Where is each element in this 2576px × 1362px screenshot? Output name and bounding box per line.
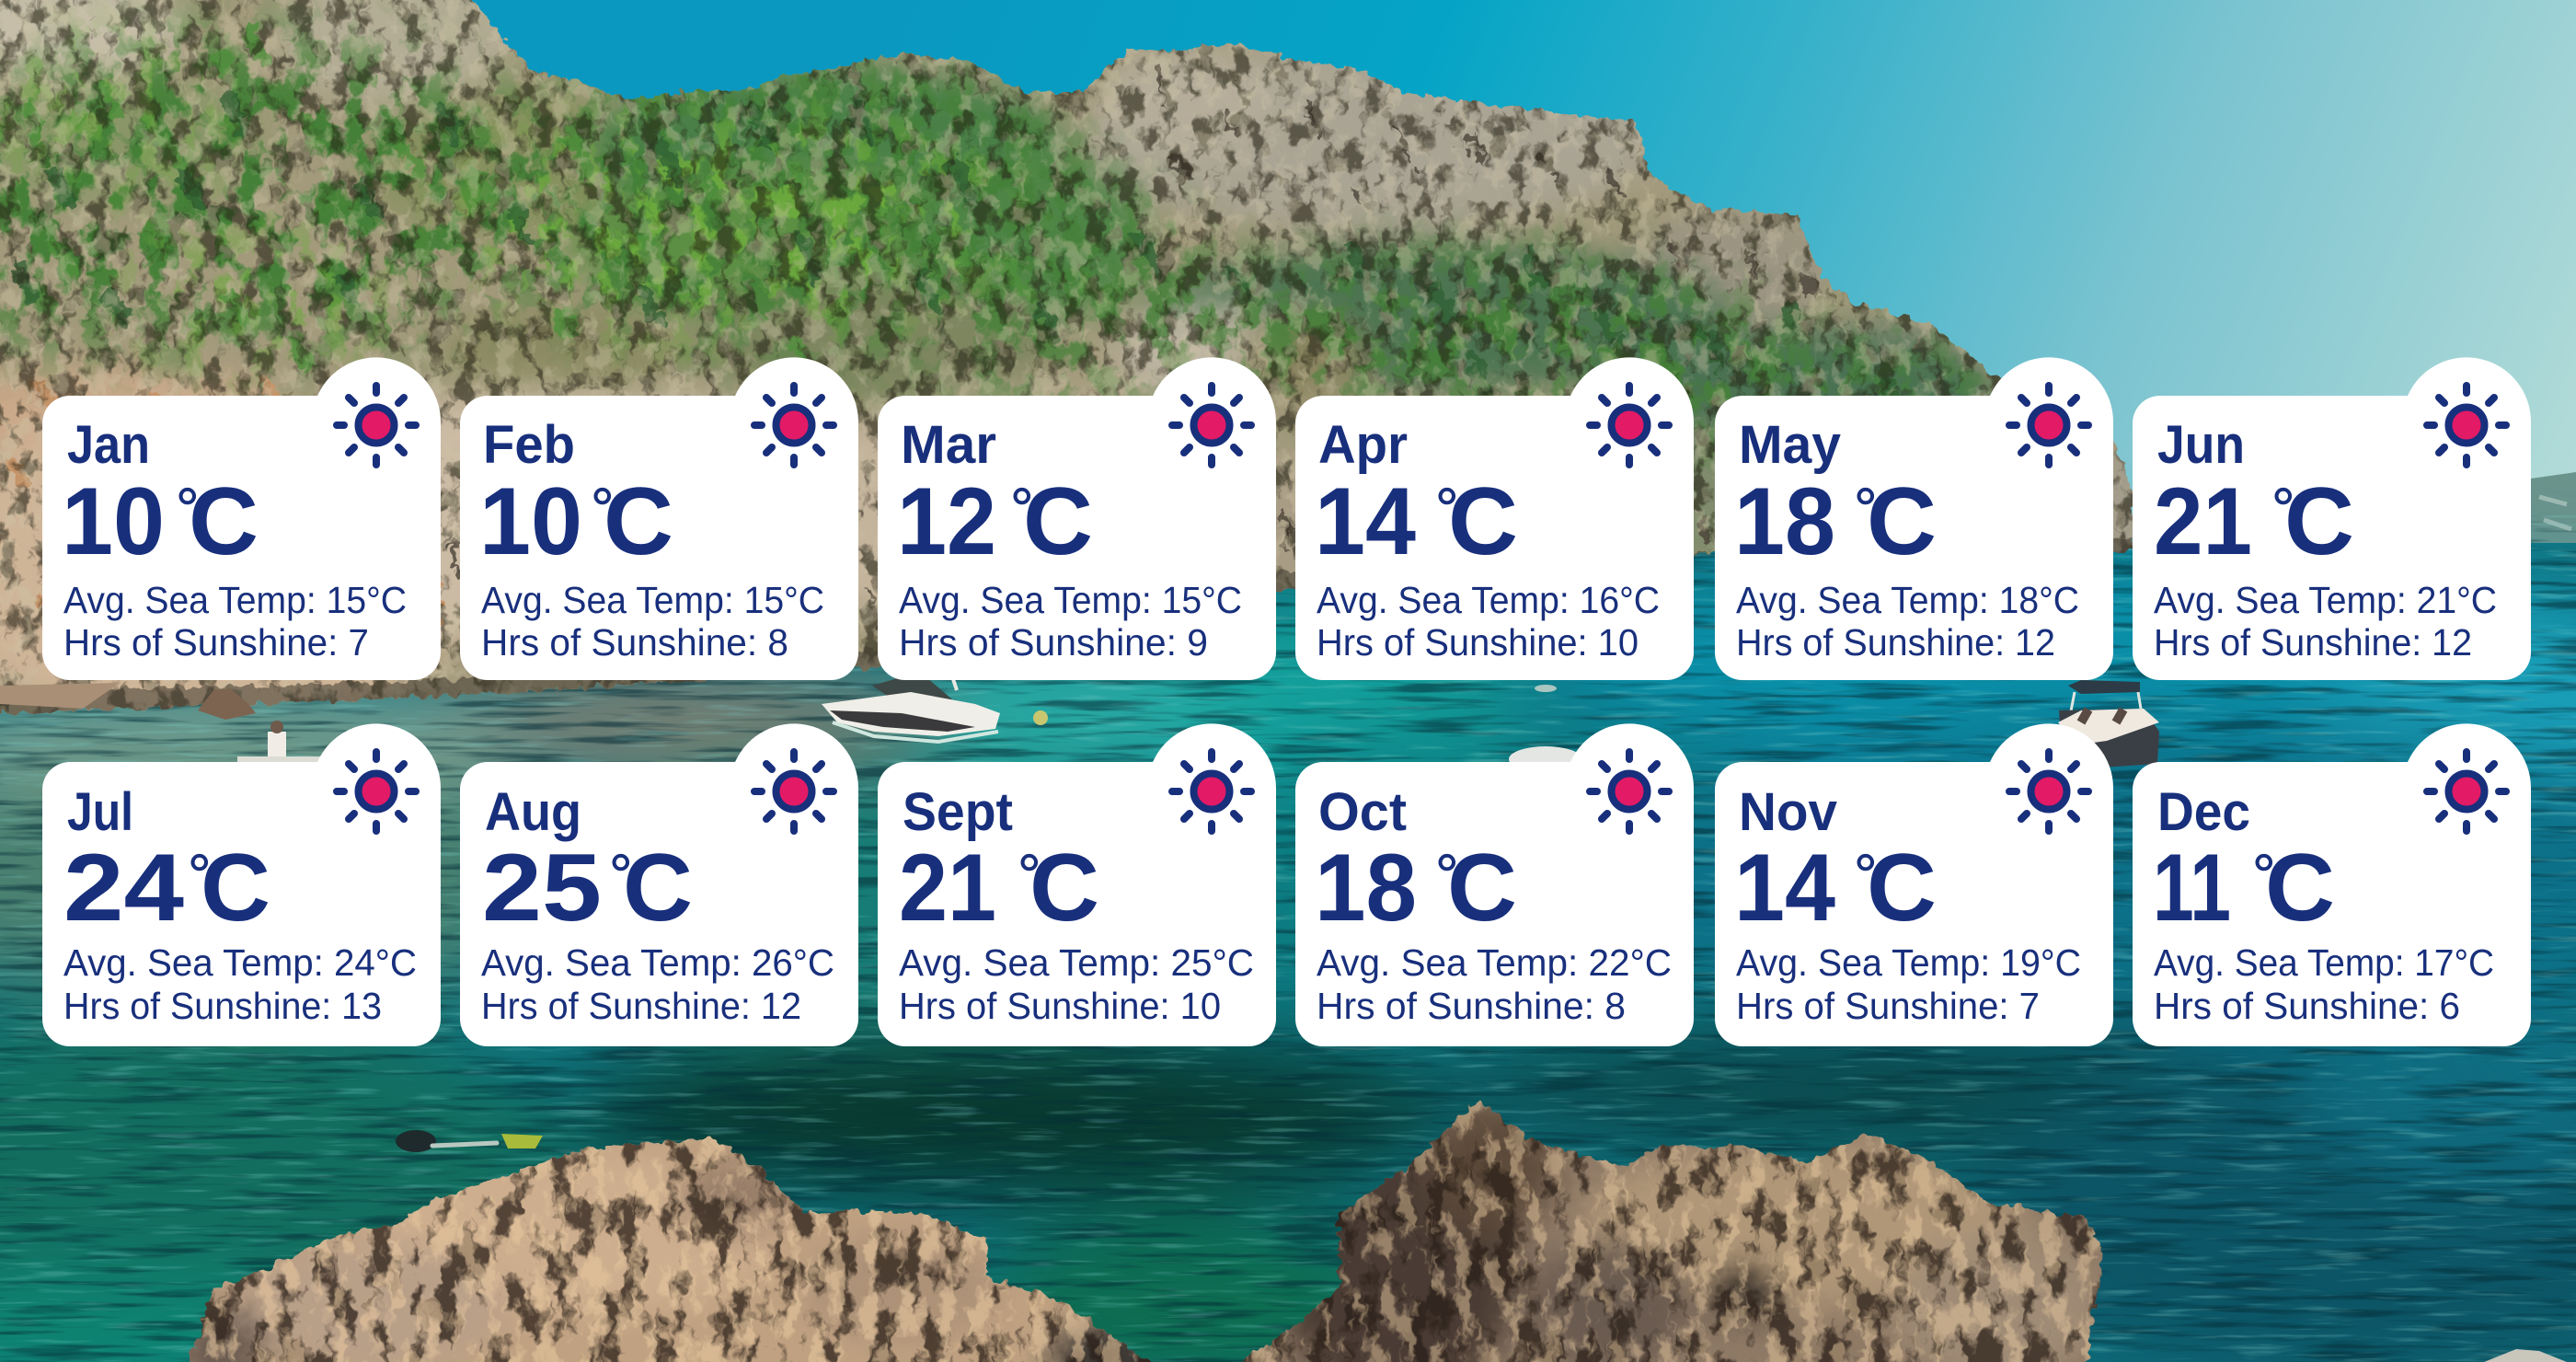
icon: sun bbox=[2427, 752, 2506, 831]
air temperature: 14 bbox=[1315, 468, 1416, 575]
white hull behind October card bbox=[1509, 746, 1582, 772]
icon: sun bbox=[2427, 386, 2506, 465]
sunshine hours: Hrs of Sunshine: 7 bbox=[1736, 985, 2040, 1027]
shore rock bbox=[0, 683, 256, 720]
month: Apr bbox=[1318, 415, 1408, 475]
card shape bbox=[878, 723, 1276, 1046]
snorkeller with yellow fin bbox=[396, 1130, 543, 1152]
sea temperature: Avg. Sea Temp: 17°C bbox=[2154, 941, 2494, 984]
month: Jul bbox=[67, 782, 133, 842]
icon: sun bbox=[754, 386, 834, 465]
sunshine hours: Hrs of Sunshine: 10 bbox=[1317, 621, 1639, 664]
air temperature: C bbox=[2265, 835, 2335, 941]
air temperature: 18 bbox=[1315, 835, 1417, 941]
card: September bbox=[878, 723, 1276, 1046]
second motor boat bbox=[2058, 680, 2159, 768]
icon: sun bbox=[1172, 386, 1251, 465]
card shape bbox=[878, 357, 1276, 680]
card: November bbox=[1715, 723, 2113, 1046]
foreground rock, right bbox=[1187, 1095, 2107, 1362]
air temperature: ° bbox=[1854, 842, 1878, 908]
air temperature: ° bbox=[591, 476, 615, 542]
sea temperature: Avg. Sea Temp: 24°C bbox=[63, 941, 417, 984]
card shape bbox=[1715, 357, 2113, 680]
person standing on small boat bbox=[237, 721, 320, 769]
card: June bbox=[2133, 357, 2531, 680]
air temperature bbox=[1315, 835, 1517, 941]
card: February bbox=[460, 357, 858, 680]
air temperature bbox=[2153, 835, 2335, 941]
icon: sun bbox=[2009, 752, 2088, 831]
icon: sun bbox=[1172, 752, 1251, 831]
air temperature: C bbox=[1447, 835, 1517, 941]
month: Jun bbox=[2157, 415, 2245, 475]
card shape bbox=[1715, 723, 2113, 1046]
air temperature: ° bbox=[1018, 842, 1041, 908]
dark rock fissures bbox=[445, 64, 1820, 631]
icon: sun bbox=[337, 386, 416, 465]
card shape bbox=[1295, 357, 1694, 680]
card: July bbox=[42, 723, 441, 1046]
air temperature: C bbox=[604, 468, 673, 575]
sunshine hours: Hrs of Sunshine: 8 bbox=[1317, 985, 1626, 1027]
shoreline shadow bbox=[0, 538, 2134, 713]
icon: sun bbox=[1590, 752, 1669, 831]
sea temperature: Avg. Sea Temp: 15°C bbox=[481, 579, 824, 621]
sea temperature: Avg. Sea Temp: 16°C bbox=[1317, 579, 1660, 621]
mid-green tree clumps bbox=[28, 28, 1098, 366]
month: Jan bbox=[67, 415, 150, 475]
vegetation texture bbox=[0, 0, 1989, 469]
card: December bbox=[2133, 723, 2531, 1046]
air temperature bbox=[899, 835, 1099, 941]
air temperature: ° bbox=[188, 842, 212, 908]
card shape bbox=[2133, 723, 2531, 1046]
air temperature: 18 bbox=[1734, 468, 1835, 575]
card: April bbox=[1295, 357, 1694, 680]
icon: sun bbox=[337, 752, 416, 831]
distant swimmer bbox=[1535, 685, 1557, 692]
air temperature: 21 bbox=[899, 835, 996, 941]
mountain and cliffs bbox=[0, 0, 2208, 736]
air temperature: ° bbox=[1010, 476, 1034, 542]
air temperature bbox=[1734, 835, 1937, 941]
air temperature: ° bbox=[1435, 842, 1459, 908]
air temperature: 10 bbox=[479, 468, 582, 575]
sea temperature: Avg. Sea Temp: 15°C bbox=[899, 579, 1242, 621]
air temperature bbox=[1315, 468, 1518, 575]
card shape bbox=[460, 357, 858, 680]
air temperature: C bbox=[189, 468, 259, 575]
air temperature bbox=[482, 835, 693, 941]
air temperature: 12 bbox=[897, 468, 996, 575]
air temperature: 10 bbox=[62, 468, 165, 575]
orange-sand slope streaks bbox=[9, 368, 438, 626]
sea temperature: Avg. Sea Temp: 21°C bbox=[2154, 579, 2497, 621]
air temperature: ° bbox=[1854, 476, 1878, 542]
air temperature: 11 bbox=[2153, 835, 2231, 941]
card: August bbox=[460, 723, 858, 1046]
card shape bbox=[460, 723, 858, 1046]
month: Nov bbox=[1739, 782, 1837, 842]
foreground rock, left bbox=[147, 1132, 1205, 1362]
dark forest clumps bbox=[18, 101, 1897, 410]
sea temperature: Avg. Sea Temp: 15°C bbox=[63, 579, 407, 621]
far headland bbox=[2475, 472, 2576, 554]
month: Sept bbox=[903, 782, 1013, 842]
sea temperature: Avg. Sea Temp: 18°C bbox=[1736, 579, 2079, 621]
air temperature: 24 bbox=[63, 835, 184, 941]
month: May bbox=[1739, 415, 1841, 475]
card shape bbox=[42, 723, 441, 1046]
sunshine hours: Hrs of Sunshine: 10 bbox=[899, 985, 1221, 1027]
air temperature: ° bbox=[609, 842, 633, 908]
air temperature: C bbox=[1867, 835, 1937, 941]
sunshine hours: Hrs of Sunshine: 12 bbox=[481, 985, 801, 1027]
card: May bbox=[1715, 357, 2113, 680]
month: Mar bbox=[901, 415, 996, 475]
sunshine hours: Hrs of Sunshine: 9 bbox=[899, 621, 1208, 664]
sunshine hours: Hrs of Sunshine: 13 bbox=[63, 985, 382, 1027]
sunshine hours: Hrs of Sunshine: 7 bbox=[63, 621, 369, 664]
icon: sun bbox=[1590, 386, 1669, 465]
sunshine hours: Hrs of Sunshine: 12 bbox=[1736, 621, 2055, 664]
icon: sun bbox=[754, 752, 834, 831]
icon: sun bbox=[2009, 386, 2088, 465]
air temperature: ° bbox=[2252, 842, 2276, 908]
moored motor boat bbox=[822, 663, 1000, 742]
air temperature: ° bbox=[2271, 476, 2295, 542]
air temperature: ° bbox=[1435, 476, 1459, 542]
card shape bbox=[42, 357, 441, 680]
air temperature: C bbox=[1023, 468, 1093, 575]
card: March bbox=[878, 357, 1276, 680]
sunshine hours: Hrs of Sunshine: 8 bbox=[481, 621, 788, 664]
air temperature: C bbox=[1029, 835, 1099, 941]
air temperature: 25 bbox=[482, 835, 602, 941]
month: Dec bbox=[2157, 782, 2250, 842]
air temperature bbox=[63, 835, 270, 941]
sea temperature: Avg. Sea Temp: 19°C bbox=[1736, 941, 2081, 984]
month: Aug bbox=[485, 782, 581, 842]
sunshine hours: Hrs of Sunshine: 12 bbox=[2154, 621, 2472, 664]
small pale rock, bottom right corner bbox=[2484, 1349, 2567, 1362]
sea temperature: Avg. Sea Temp: 22°C bbox=[1317, 941, 1672, 984]
air temperature: C bbox=[1448, 468, 1518, 575]
air temperature bbox=[897, 468, 1093, 575]
month: Feb bbox=[483, 415, 575, 475]
buoy bbox=[1033, 710, 1048, 725]
month: Oct bbox=[1318, 782, 1407, 842]
sunshine hours: Hrs of Sunshine: 6 bbox=[2154, 985, 2460, 1027]
air temperature bbox=[479, 468, 673, 575]
air temperature bbox=[62, 468, 259, 575]
card: October bbox=[1295, 723, 1694, 1046]
air temperature: C bbox=[201, 835, 270, 941]
air temperature: 21 bbox=[2154, 468, 2252, 575]
card shape bbox=[1295, 723, 1694, 1046]
card: January bbox=[42, 357, 441, 680]
air temperature: C bbox=[1867, 468, 1937, 575]
air temperature: C bbox=[2284, 468, 2354, 575]
air temperature: ° bbox=[176, 476, 200, 542]
card shape bbox=[2133, 357, 2531, 680]
sea temperature: Avg. Sea Temp: 26°C bbox=[481, 941, 834, 984]
air temperature bbox=[1734, 468, 1937, 575]
sea bbox=[0, 543, 2576, 1362]
sea temperature: Avg. Sea Temp: 25°C bbox=[899, 941, 1254, 984]
air temperature bbox=[2154, 468, 2354, 575]
air temperature: 14 bbox=[1734, 835, 1835, 941]
air temperature: C bbox=[623, 835, 693, 941]
sky bbox=[0, 0, 2576, 589]
